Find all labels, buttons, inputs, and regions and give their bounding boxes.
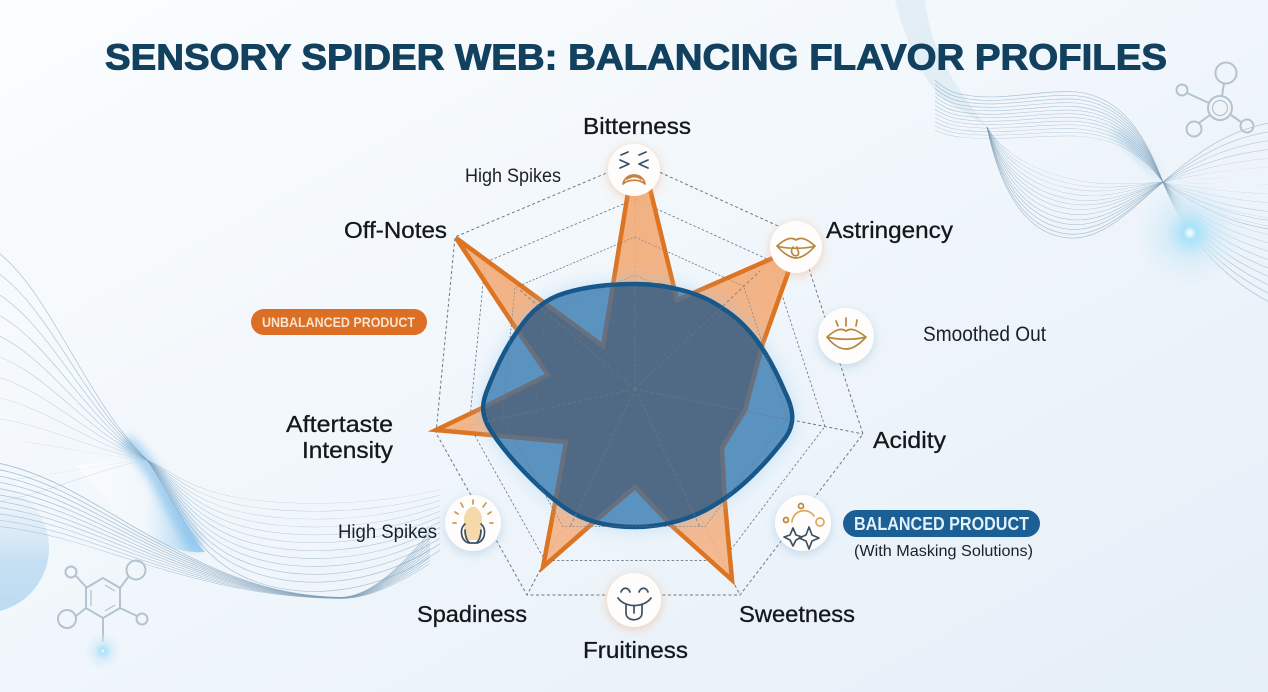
label: Spadiness: Spadiness	[417, 601, 527, 627]
title: SENSORY SPIDER WEB: BALANCING FLAVOR PROFILES	[105, 36, 1167, 78]
balanced product blob	[470, 270, 801, 537]
icon: molecule top right	[1176, 62, 1254, 136]
label: Sweetness: Sweetness	[739, 601, 855, 627]
icon: smoothed lips	[818, 308, 874, 364]
label: Aftertaste Intensity: Aftertaste	[286, 411, 393, 437]
unbalanced product polygon	[436, 168, 796, 580]
label: Aftertaste Intensity	[286, 411, 394, 463]
icon: bitterness face	[608, 144, 660, 196]
label: Acidity: Acidity	[873, 427, 947, 453]
icon: sparkles	[775, 495, 831, 551]
label: Bitterness: Bitterness	[583, 113, 691, 139]
badge: balanced product	[843, 510, 1040, 560]
badge: balanced product: (With Masking Solutions)	[854, 543, 1033, 560]
badge: balanced product: BALANCED PRODUCT	[854, 514, 1029, 534]
label: Fruitiness: Fruitiness	[583, 637, 688, 663]
icon: fruitiness face	[607, 573, 661, 627]
badge: unbalanced product: UNBALANCED PRODUCT	[262, 314, 415, 330]
decorative wave: top right	[895, 0, 1268, 312]
icon: astringency lips	[770, 221, 822, 273]
icon: high spikes bulb	[445, 495, 501, 551]
glow: top right	[1135, 178, 1245, 288]
label: Aftertaste Intensity: Intensity	[302, 437, 394, 463]
web grid	[436, 161, 863, 595]
annotation: High Spikes lower: High Spikes	[338, 522, 437, 543]
annotation: High Spikes top: High Spikes	[465, 166, 561, 187]
annotation: Smoothed Out: Smoothed Out	[923, 323, 1046, 346]
badge: unbalanced product	[251, 309, 427, 335]
decorative wave: lower left	[0, 250, 440, 613]
label: Astringency: Astringency	[826, 217, 954, 243]
label: Off-Notes: Off-Notes	[344, 217, 447, 243]
web grid overlay	[484, 237, 790, 527]
icon: molecule lower left	[58, 560, 148, 670]
radar chart	[436, 161, 863, 595]
